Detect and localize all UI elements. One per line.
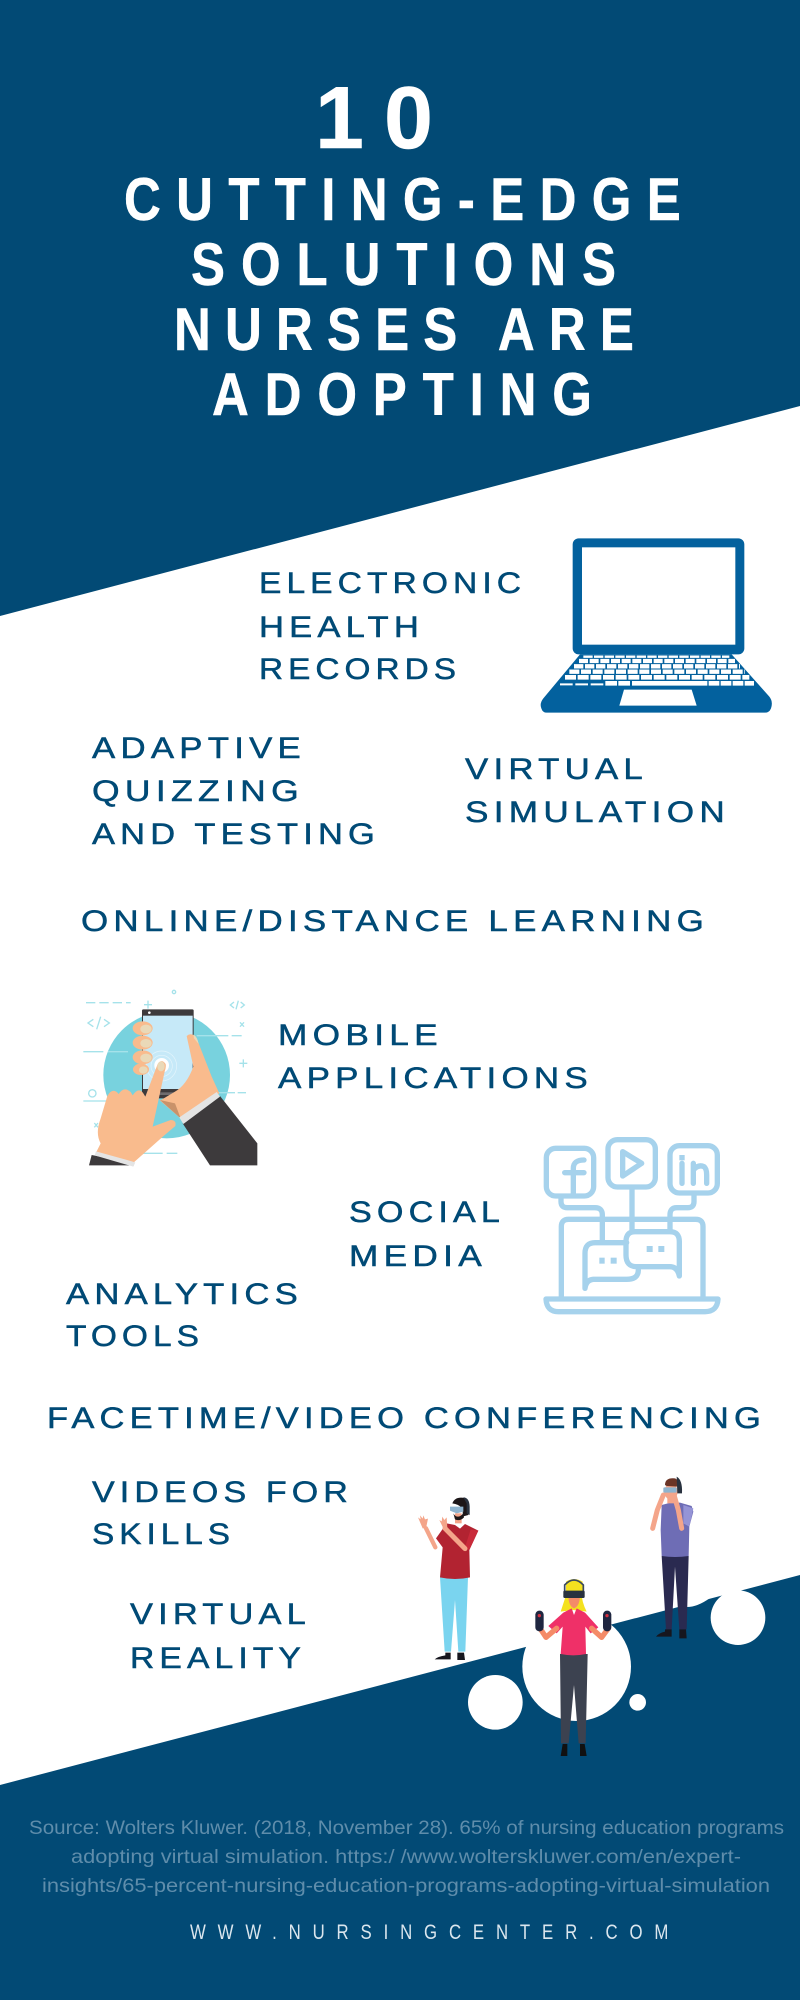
text: virtual simulation: VIRTUAL <box>465 753 648 786</box>
text: website url: WWW.NURSINGCENTER.COM <box>190 1921 668 1945</box>
text: mobile applications <box>278 1019 593 1095</box>
text: analytics tools <box>66 1278 303 1353</box>
text: adaptive quizzing and testing: AND TESTING <box>92 818 380 851</box>
text: social media: SOCIAL <box>349 1196 505 1229</box>
title: 10 <box>315 68 433 167</box>
text: social media: MEDIA <box>349 1240 487 1273</box>
woman with pink shirt <box>535 1579 611 1756</box>
text: online/distance learning: ONLINE/DISTANCE LEARNING <box>81 905 709 938</box>
text: virtual reality <box>130 1598 311 1675</box>
text: adaptive quizzing and testing <box>92 732 380 851</box>
title: CUTTING-EDGE <box>124 166 681 233</box>
text: adaptive quizzing and testing: QUIZZING <box>92 775 304 808</box>
text: analytics tools: ANALYTICS <box>66 1278 303 1311</box>
man with purple shirt <box>653 1477 693 1638</box>
white circles <box>468 1590 765 1730</box>
text: mobile applications: APPLICATIONS <box>278 1062 593 1095</box>
title: ADOPTING <box>212 361 592 428</box>
panel: top blue header <box>0 0 800 616</box>
text: virtual simulation <box>465 753 730 829</box>
text: source citation: Source: Wolters Kluwer. (2018, November 28). 65% of nursing education programs <box>29 1817 784 1839</box>
text: virtual reality: VIRTUAL <box>130 1598 311 1631</box>
icon: laptop <box>541 538 772 713</box>
text: source citation: adopting virtual simulation. https:/ /www.wolterskluwer.com/en/expert- <box>71 1846 741 1868</box>
title: NURSES ARE <box>174 296 634 363</box>
text: videos for skills: SKILLS <box>92 1518 235 1551</box>
text: virtual simulation: SIMULATION <box>465 796 730 829</box>
text: social media <box>349 1196 505 1273</box>
text: electronic health records <box>259 567 526 686</box>
text: adaptive quizzing and testing: ADAPTIVE <box>92 732 306 765</box>
text: electronic health records: ELECTRONIC <box>259 567 526 600</box>
text: videos for skills: VIDEOS FOR <box>92 1476 353 1509</box>
man with red shirt <box>418 1497 478 1660</box>
text: virtual reality: REALITY <box>130 1642 306 1675</box>
text: videos for skills <box>92 1476 353 1551</box>
title: SOLUTIONS <box>191 231 616 298</box>
text: mobile applications: MOBILE <box>278 1019 443 1052</box>
text: analytics tools: TOOLS <box>66 1320 204 1353</box>
icon: hands holding phone <box>83 990 257 1167</box>
text: source citation <box>29 1817 784 1897</box>
text: electronic health records: HEALTH <box>259 611 424 644</box>
text: source citation: insights/65-percent-nursing-education-programs-adopting-virtual-simulation <box>42 1875 770 1897</box>
illustration: people using VR headsets <box>418 1477 765 1756</box>
text: electronic health records: RECORDS <box>259 653 461 686</box>
text: facetime/video conferencing: FACETIME/VIDEO CONFERENCING <box>47 1402 766 1435</box>
panel: bottom blue footer <box>0 1575 800 2000</box>
title <box>124 68 681 428</box>
icon: social media laptop <box>546 1140 718 1312</box>
